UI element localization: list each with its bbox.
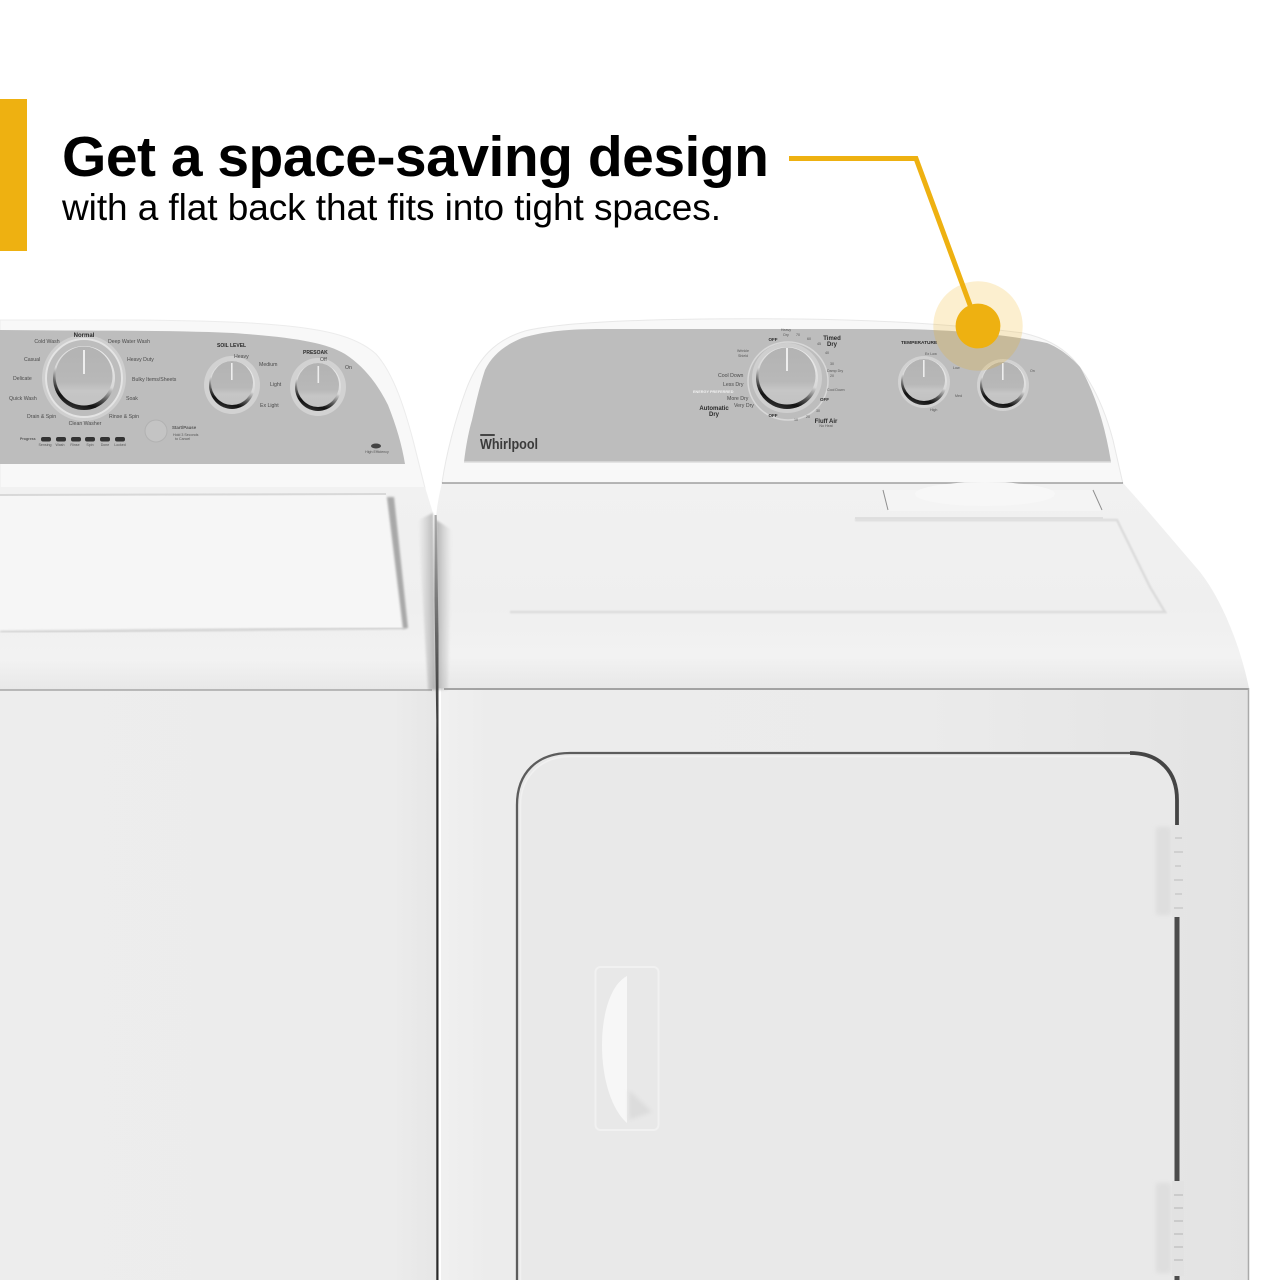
dryer control labels: Cool Down	[827, 388, 845, 392]
dryer end of cycle dial	[977, 359, 1029, 411]
dryer top panel edges	[510, 520, 1165, 612]
Whirlpool logo: Whirlpool	[480, 436, 538, 453]
dryer control labels: Timed	[823, 336, 841, 342]
washer control labels: SOIL LEVEL	[217, 343, 246, 349]
washer control labels: Soak	[126, 396, 138, 402]
dryer control labels: ENERGY PREFERRED	[693, 390, 734, 394]
dryer control labels: Shield	[738, 354, 748, 358]
dryer control labels: Med	[955, 394, 962, 398]
washer cabinet front	[0, 690, 436, 1280]
washer control labels: Deep Water Wash	[108, 339, 150, 345]
washer control labels: Sensing	[38, 443, 52, 447]
washer control labels: Rinse & Spin	[109, 414, 139, 420]
dryer control labels: Damp Dry	[827, 369, 843, 373]
washer control labels: Done	[101, 443, 109, 447]
dryer temperature dial	[898, 356, 950, 408]
washer control labels: On	[345, 365, 352, 371]
dryer control labels: 20	[806, 415, 810, 419]
washer control labels: Clean Washer	[69, 421, 102, 427]
washer control labels: Hold 3 Seconds	[173, 433, 199, 437]
washer control labels: Light	[270, 382, 282, 388]
washer control labels: Quick Wash	[9, 396, 37, 402]
washer control labels: Drain & Spin	[27, 414, 56, 420]
subheading: with a flat back that fits into tight spaces.	[61, 187, 721, 228]
door handle	[596, 967, 658, 1130]
washer control labels: Progress	[20, 437, 36, 441]
washer main dial	[42, 335, 126, 421]
dryer control labels: Very Dry	[734, 403, 754, 409]
washer control labels: Off	[320, 357, 327, 363]
washer console panel	[0, 330, 405, 464]
dryer control labels: 30	[816, 409, 820, 413]
washer control labels: Heavy Duty	[127, 357, 154, 363]
washer control labels	[9, 333, 389, 454]
dryer control labels: Dry	[783, 333, 789, 337]
dryer control labels: TEMPERATURE	[901, 340, 938, 346]
washer control labels: Rinse	[70, 443, 80, 447]
washer control labels: Cold Wash	[34, 339, 60, 345]
dryer (right appliance)	[435, 319, 1249, 1280]
washer control labels: Locked	[114, 443, 126, 447]
dryer control labels: More Dry	[727, 396, 749, 402]
lower door hinge	[1156, 1181, 1184, 1276]
dryer console rim highlight	[464, 461, 1111, 463]
washer control labels: Wash	[55, 443, 65, 447]
dryer cabinet front	[441, 688, 1249, 1280]
dryer control labels: 10	[794, 418, 798, 422]
dryer control labels: Wrinkle	[737, 349, 749, 353]
dryer control labels: Dry	[709, 412, 720, 418]
gap between appliances	[418, 513, 452, 1280]
washer control labels: Normal	[74, 333, 95, 339]
washer console housing	[0, 320, 425, 488]
washer control labels: Delicate	[13, 376, 32, 382]
washer top cover	[0, 487, 436, 690]
washer control labels: Medium	[259, 362, 277, 368]
dryer control labels: Low	[953, 366, 960, 370]
washer control labels: Start/Pause	[172, 425, 197, 430]
dryer control labels	[693, 328, 1035, 428]
dryer control labels: OFF	[768, 413, 778, 418]
washer control labels: PRESOAK	[303, 350, 328, 356]
dryer control labels: No Heat	[819, 424, 833, 428]
dryer control labels: High	[930, 408, 937, 412]
washer control labels: Ex Light	[260, 403, 279, 409]
dryer control labels: 40	[825, 351, 829, 355]
dryer control labels: Fluff Air	[815, 419, 838, 425]
washer control labels: to Cancel	[175, 437, 190, 441]
yellow accent bar	[0, 99, 27, 251]
dryer control labels: Ex Low	[925, 352, 937, 356]
dryer control labels: Dry	[827, 342, 838, 348]
dryer control labels: Cool Down	[718, 373, 743, 379]
dryer control labels: OFF	[768, 337, 778, 342]
washer lid	[0, 494, 408, 632]
dryer control labels: On	[1030, 369, 1035, 373]
callout leader line	[789, 158, 977, 324]
dryer control labels: 45	[817, 342, 821, 346]
dryer control labels: 20	[830, 374, 834, 378]
upper door hinge	[1156, 825, 1184, 917]
callout marker	[933, 281, 1023, 371]
washer start button	[145, 420, 167, 442]
dryer door	[517, 753, 1180, 1280]
washer control labels: Casual	[24, 357, 40, 363]
heading: Get a space-saving design	[62, 125, 769, 189]
dryer console housing	[442, 319, 1123, 484]
dryer control labels: Heavy	[781, 328, 791, 332]
dryer control labels: Less Dry	[723, 382, 744, 388]
dryer console panel	[464, 329, 1111, 462]
dryer main dial	[748, 342, 828, 420]
washer progress lights	[41, 437, 125, 442]
washer soil level dial	[204, 356, 260, 414]
washer efficiency logo	[371, 444, 381, 448]
washer control labels: Heavy	[234, 354, 249, 360]
lint screen recess	[855, 482, 1103, 518]
washer control labels: Bulky Items/Sheets	[132, 377, 177, 383]
dryer control labels: 30	[830, 362, 834, 366]
dryer top	[435, 483, 1249, 688]
washer presoak dial	[290, 358, 346, 416]
dryer control labels: 60	[807, 337, 811, 341]
dryer control labels: OFF	[820, 397, 829, 402]
dryer control labels: Automatic	[699, 406, 729, 412]
dryer control labels: 70	[796, 333, 800, 337]
washer (left appliance)	[0, 320, 436, 1280]
washer control labels: High Efficiency	[365, 450, 389, 454]
washer control labels: Spin	[86, 443, 94, 447]
